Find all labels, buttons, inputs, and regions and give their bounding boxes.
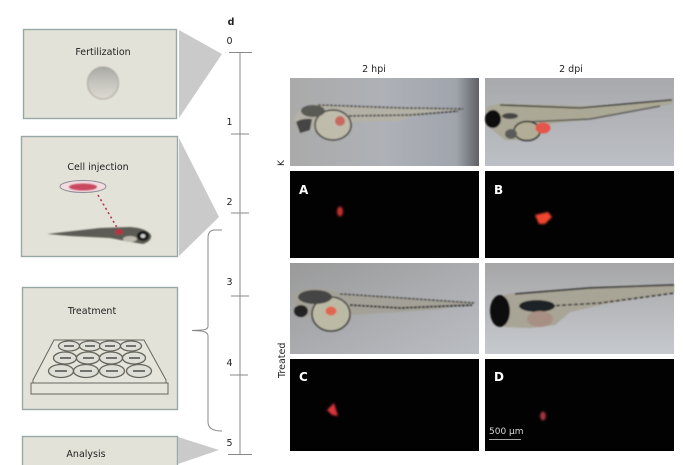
timeline axis in days: 2 [226,197,233,208]
panel: fertilization step [24,30,176,118]
panel letter D: D [494,370,504,384]
photo: fluorescence panel B [485,171,674,258]
icon: fertilized egg [88,67,118,99]
column heading: 2 dpi: 2 dpi [559,64,583,75]
panel letter B: B [494,183,503,197]
row label: treated: Treated [277,343,288,379]
brace: treatment period [192,230,222,431]
arrow: fertilization to day 0 [179,30,222,118]
panel letter C: C [299,370,308,384]
fluorescent cell mass D [540,412,546,420]
photo: treated larva 2 hpi [290,263,479,354]
icon: petri dish with cells [60,180,106,192]
panel: treatment step [22,288,178,410]
photo: treated larva 2 dpi [485,263,674,354]
fluorescent cell mass C [327,403,338,416]
heading: cell injection: Cell injection [67,162,129,173]
fluorescent cell mass B [535,212,552,224]
heading: fertilization: Fertilization [75,47,131,58]
arrow: injection line [98,195,119,231]
timeline axis in days: 4 [226,358,233,369]
timeline axis in days [226,17,252,455]
panel: cell injection step [22,136,178,256]
panel letter A: A [299,183,309,197]
scale bar: 500 µm: 500 μm [489,427,524,437]
photo: fluorescence panel A [290,171,479,258]
fluorescent cell mass A [337,206,343,216]
photo: fluorescence panel C [290,359,479,451]
timeline axis in days: 1 [226,117,233,128]
icon: injected zebrafish larva [47,227,151,244]
photo: control larva 2 dpi [485,78,674,166]
photo: fluorescence panel D [485,359,674,451]
arrow: injection to day 2 [179,138,219,256]
arrow: analysis to day 5 [178,437,219,464]
timeline axis in days: 5 [226,438,233,449]
timeline axis in days: 0 [226,36,233,47]
panel: analysis step [22,436,178,465]
photo: control larva 2 hpi [290,78,479,166]
column heading: 2 hpi: 2 hpi [362,64,386,75]
heading: analysis: Analysis [66,449,106,460]
icon: multi-well plate with larvae [31,340,168,394]
timeline axis in days: d [228,17,234,28]
timeline axis in days: 3 [226,277,233,288]
heading: treatment: Treatment [67,306,116,317]
row label: K: K [277,159,287,166]
